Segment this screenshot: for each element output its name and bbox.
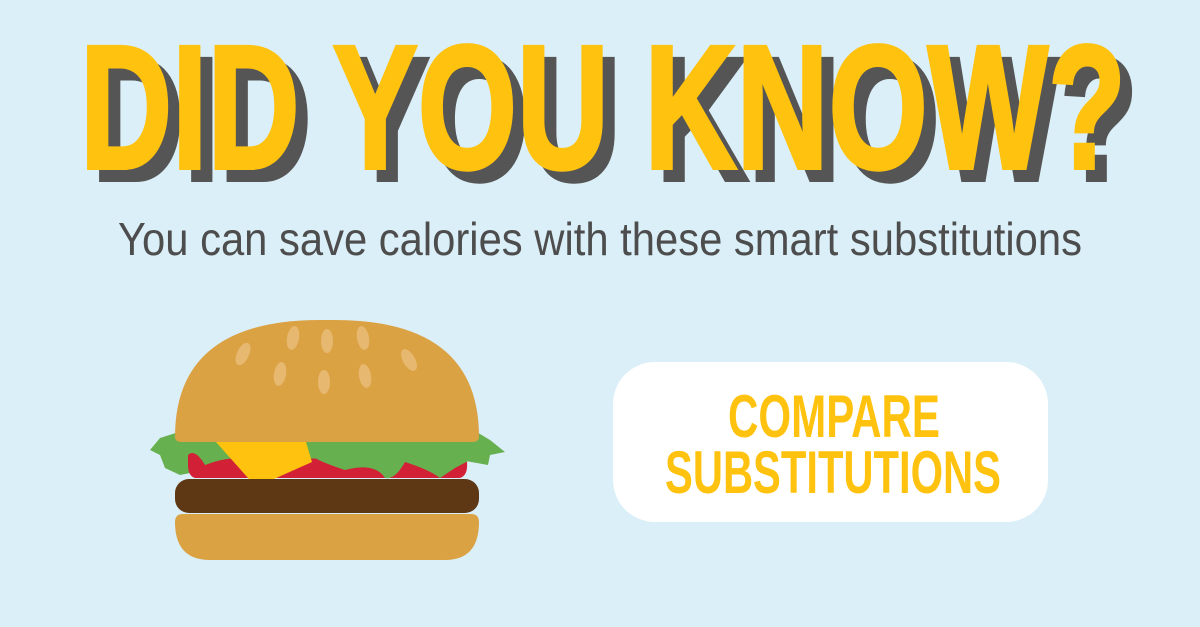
button: compare substitutions bbox=[613, 362, 1048, 522]
lettuce bbox=[150, 428, 505, 475]
subtitle: You can save calories with these smart substitutions bbox=[118, 213, 1082, 265]
lettuce front right bbox=[305, 442, 500, 478]
button: compare substitutions: COMPARE bbox=[728, 383, 940, 450]
button: compare substitutions: SUBSTITUTIONS bbox=[665, 439, 1001, 506]
cheese bbox=[216, 442, 312, 487]
patty bbox=[175, 479, 479, 513]
icon: burger bbox=[150, 320, 505, 560]
bun top bbox=[175, 320, 479, 442]
tomato bbox=[188, 453, 467, 478]
seeds bbox=[232, 325, 420, 394]
bun bottom bbox=[175, 514, 479, 560]
